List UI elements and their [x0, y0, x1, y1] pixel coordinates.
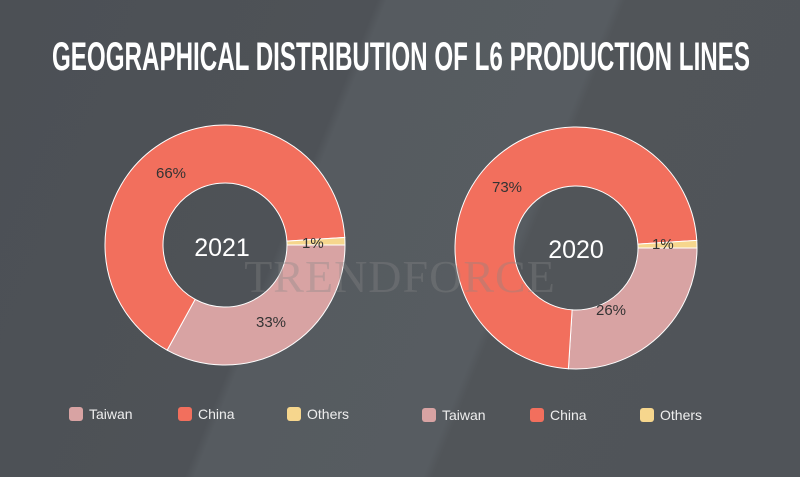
center label 2021: 2021 [194, 234, 250, 262]
legend 2020: Taiwan [442, 407, 486, 423]
legend 2021: China [198, 406, 235, 422]
donut labels 2020 [492, 179, 674, 319]
donut labels 2021: 66% [156, 165, 186, 182]
legend 2020: Others [660, 407, 702, 423]
watermark: TRENDFORCE [244, 251, 556, 302]
donut chart: 2021 [105, 125, 345, 365]
donut labels 2021: 33% [256, 314, 286, 331]
donut chart: 2020 [455, 127, 697, 369]
legend 2021: Others [307, 406, 349, 422]
donut labels 2021 [156, 165, 324, 331]
donut labels 2020: 26% [596, 302, 626, 319]
center label 2020: 2020 [548, 236, 604, 264]
legend 2020 [422, 407, 702, 423]
legend 2020: China [550, 407, 587, 423]
donut labels 2020: 73% [492, 179, 522, 196]
donut labels 2020: 1% [652, 236, 674, 253]
donut labels 2021: 1% [302, 235, 324, 252]
legend 2021 [69, 406, 349, 422]
legend 2021: Taiwan [89, 406, 133, 422]
